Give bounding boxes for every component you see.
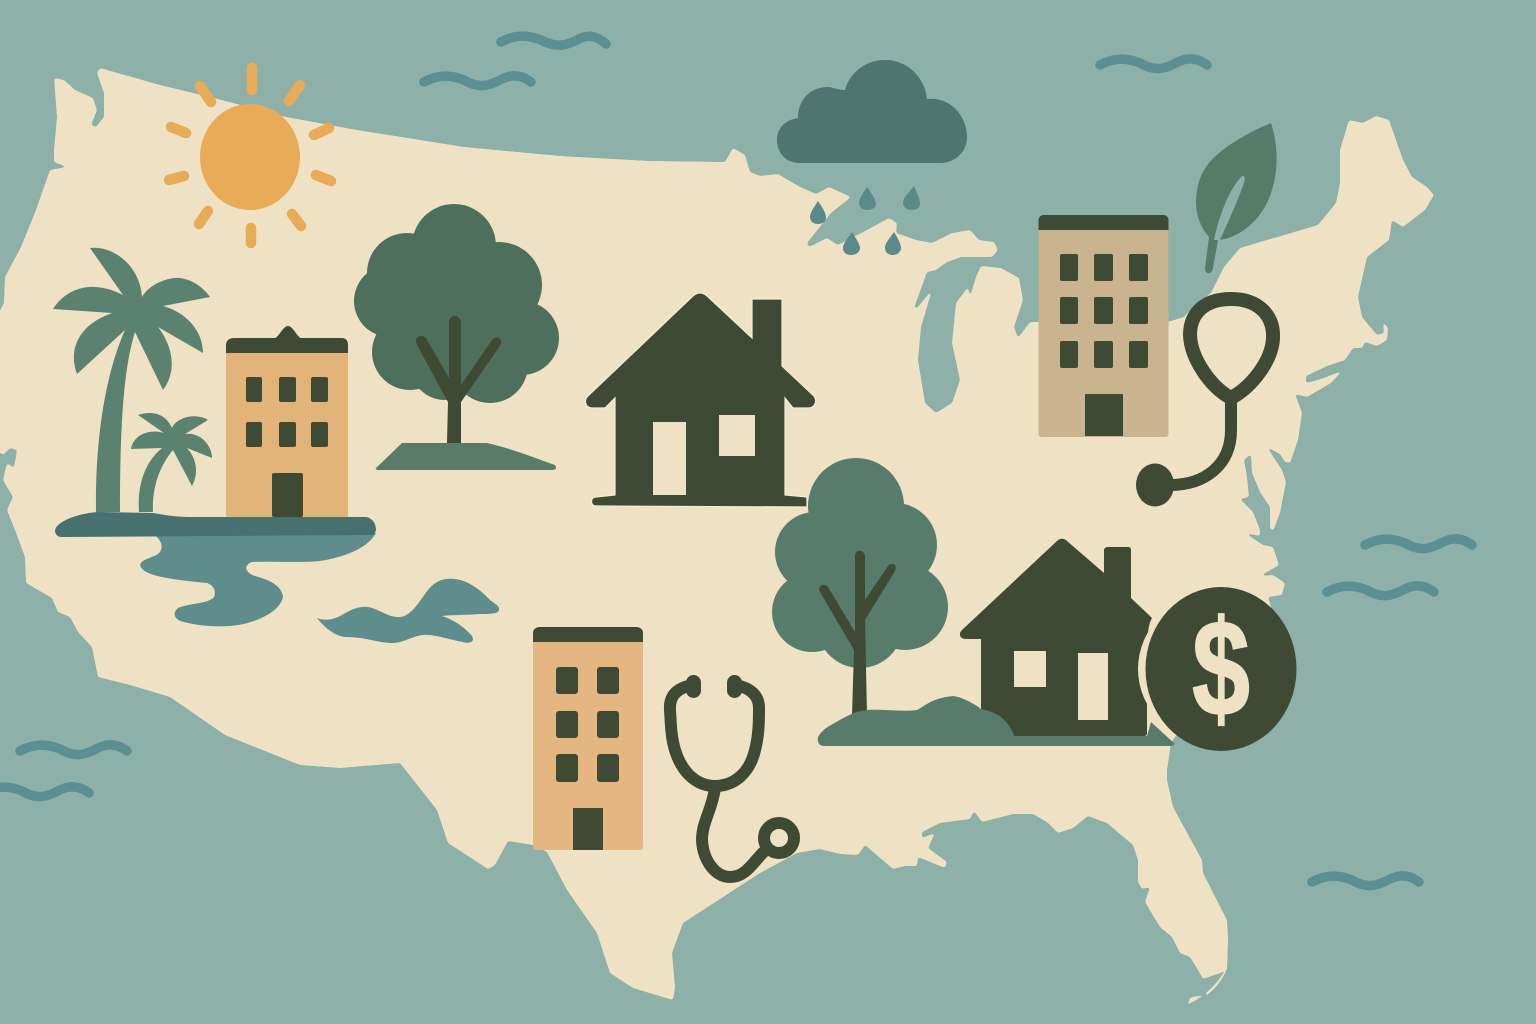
large oak tree [354, 204, 559, 470]
window and door [1014, 651, 1108, 720]
windows and door [1060, 254, 1148, 436]
Florida keys [1188, 968, 1227, 1004]
grass mound under house [818, 696, 1175, 746]
icon: dollar coin [1138, 587, 1296, 751]
icon: stethoscope south [670, 675, 794, 877]
icon: stethoscope north-east [1136, 299, 1273, 506]
ocean waves [0, 36, 1472, 886]
office building with stethoscope [1038, 215, 1168, 437]
raindrops [810, 186, 920, 255]
large palm tree [53, 248, 210, 512]
south-east house [960, 539, 1152, 736]
windows and door [556, 667, 619, 850]
southern building [533, 627, 643, 850]
small lake [317, 579, 499, 643]
roof [1038, 215, 1168, 230]
coastal ground strip [55, 512, 376, 537]
grass mound [376, 443, 556, 470]
icon: leaf [1196, 123, 1277, 273]
windows [246, 377, 328, 517]
south-east tree [772, 458, 948, 715]
icon: rain cloud [777, 60, 967, 255]
icon: sun [169, 68, 331, 243]
trunk and branches [416, 316, 501, 443]
small palm tree [131, 413, 212, 512]
lake below the coast [140, 533, 376, 626]
roof [533, 627, 643, 642]
trunk and branches [819, 551, 896, 715]
door and window [653, 415, 755, 495]
dollar sign: $ [1192, 592, 1250, 744]
main house [585, 293, 816, 507]
roof [226, 326, 348, 353]
leaf midrib slit [1214, 176, 1245, 240]
hotel building [226, 326, 348, 517]
